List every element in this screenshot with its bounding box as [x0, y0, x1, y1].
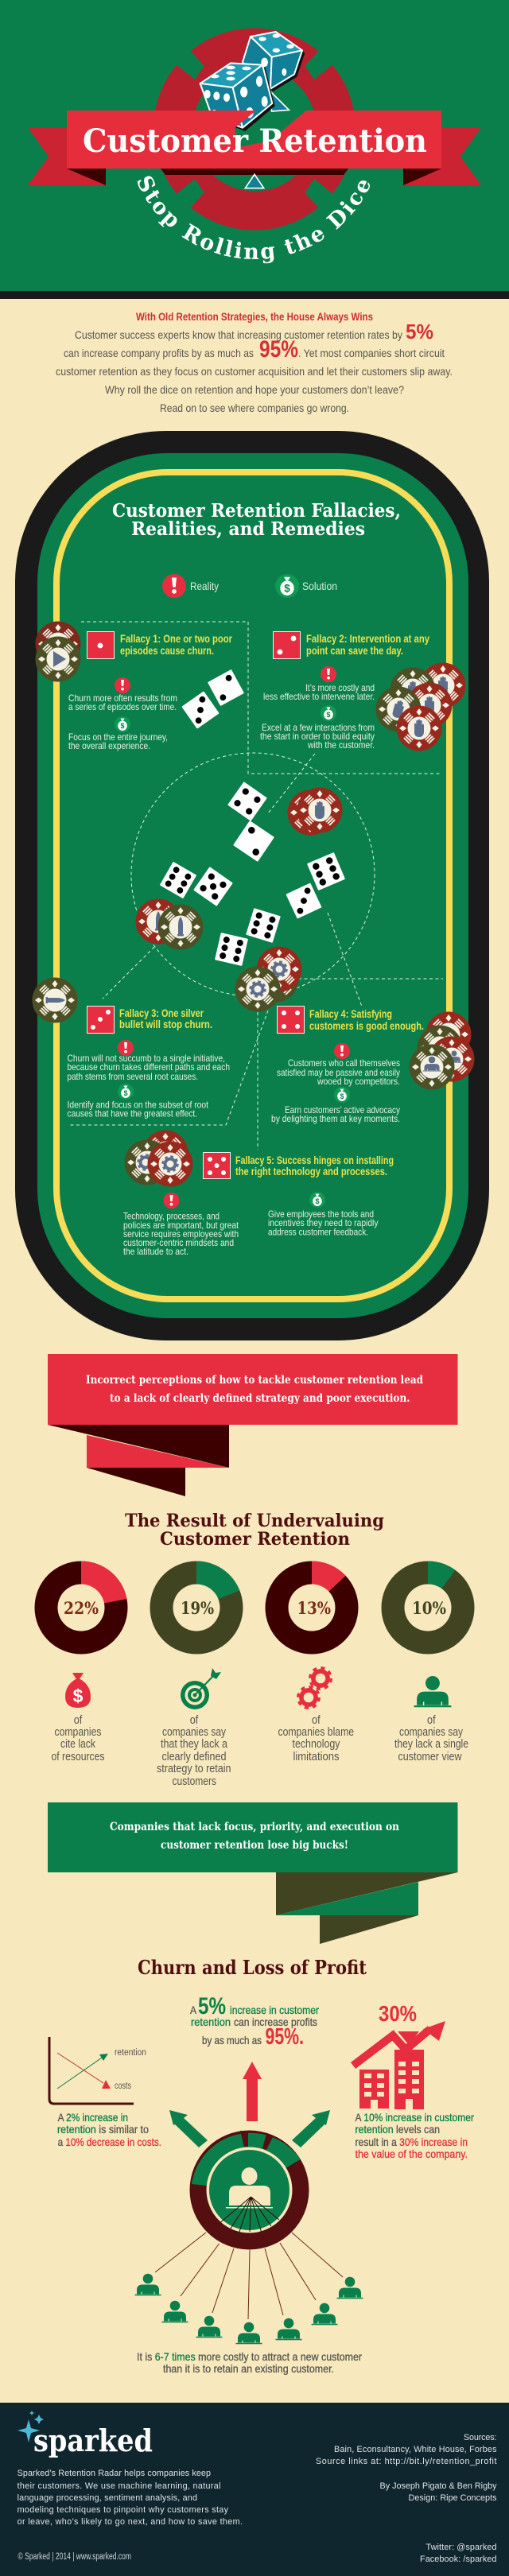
icon: building with growth arrow: 30% — [379, 2001, 417, 2026]
chip stack: gears centre — [235, 946, 302, 1011]
green ribbon callout: customer retention lose big bucks! — [161, 1839, 348, 1852]
intro text block: Read on to see where companies go wrong. — [160, 402, 349, 414]
icon: money bag — [65, 1673, 91, 1708]
red ribbon callout: to a lack of clearly defined strategy and poor execution. — [110, 1392, 410, 1405]
sources: Twitter: @sparked — [426, 2543, 496, 2552]
icon: building with growth arrow — [353, 2001, 445, 2109]
fallacy 3: Fallacy 3: One silver — [119, 1007, 204, 1019]
chip: bullet horizontal — [32, 978, 78, 1022]
title: Customer Retention — [83, 122, 427, 160]
about text: their customers. We use machine learning, natural — [17, 2481, 220, 2491]
chip stack: silver bullet — [135, 898, 204, 949]
fallacy 1: a series of episodes over time. — [68, 701, 177, 712]
fallacy 5: address customer feedback. — [268, 1226, 368, 1237]
donut chart 10%: 10% — [412, 1598, 446, 1618]
heading: result of undervaluing: The Result of Undervaluing — [125, 1511, 384, 1531]
caption column 4: companies say — [399, 1726, 464, 1739]
fallacy 4: by delighting them at key moments. — [271, 1113, 400, 1124]
fallacy 5: Give employees the tools and — [268, 1208, 374, 1220]
text: 2 percent: A 2% increase in — [58, 2111, 128, 2124]
icon: gears — [298, 1668, 331, 1708]
caption column 4 — [394, 1714, 468, 1763]
intro text block — [56, 310, 453, 414]
subtitle curved: Stop Rolling the Dice — [137, 177, 371, 264]
line chart: retention vs costs: costs — [115, 2081, 131, 2091]
chip stack: gears lower — [124, 1131, 192, 1186]
caption column 2: customers — [172, 1775, 216, 1788]
fallacy 2: the start in order to build equity — [260, 731, 375, 742]
dice pair — [181, 669, 244, 729]
fallacy 1: Fallacy 1: One or two poor — [120, 632, 232, 645]
text: 2 percent — [57, 2111, 161, 2148]
donut chart 22% — [35, 1562, 127, 1654]
fallacy 4: Fallacy 4: Satisfying — [309, 1007, 392, 1020]
intro text block: With Old Retention Strategies, the House Always Wins — [136, 310, 373, 323]
fallacy 4: Earn customers’ active advocacy — [285, 1104, 400, 1115]
table heading: Realities, and Remedies — [131, 518, 365, 540]
fallacy 3: because churn takes different paths and each — [67, 1061, 230, 1073]
caption column 2: strategy to retain — [157, 1763, 231, 1775]
intro text block: 95% — [259, 336, 298, 363]
fallacy 2: less effective to intervene later. — [263, 691, 375, 702]
table heading — [112, 500, 401, 540]
about text: language processing, sentiment analysis, and — [17, 2493, 197, 2503]
sources: By Joseph Pigato & Ben Rigby — [380, 2481, 497, 2491]
chip: play — [35, 622, 81, 682]
caption column 2: of — [190, 1714, 199, 1727]
green ribbon callout — [48, 1802, 458, 1944]
callout: 5 percent: 5% — [198, 1993, 226, 2019]
fallacy 1: Churn more often results from — [68, 692, 177, 704]
intro text block: Customer success experts know that increasing customer retention rates by — [75, 328, 402, 341]
fallacy 2 — [260, 631, 429, 751]
big chip with customer — [189, 2131, 309, 2250]
icon: person — [414, 1676, 451, 1707]
chip stack: hands — [375, 663, 466, 751]
caption column 3: technology — [293, 1738, 340, 1751]
donut chart 13% — [266, 1562, 358, 1654]
fallacy 5: incentives they need to rapidly — [268, 1217, 379, 1228]
text: 6-7 times — [137, 2350, 362, 2375]
text: 10 percent: the value of the company. — [355, 2147, 468, 2160]
callout: 5 percent: A — [190, 2004, 197, 2016]
intro text block: 5% — [406, 320, 433, 343]
panel: footer — [0, 2403, 509, 2576]
caption column 1: of — [74, 1714, 83, 1727]
sources: Bain, Econsultancy, White House, Forbes — [334, 2445, 497, 2454]
text: 10 percent — [355, 2111, 474, 2160]
caption column 1: of resources — [51, 1751, 105, 1763]
header panel — [0, 0, 509, 299]
caption column 1: cite lack — [60, 1738, 96, 1751]
donut chart 13%: 13% — [297, 1598, 331, 1618]
about text — [17, 2469, 243, 2527]
sources — [316, 2433, 497, 2564]
icon: target — [181, 1668, 221, 1709]
icon: right arrow — [292, 2110, 330, 2147]
legend: Reality — [190, 580, 219, 592]
intro text block: Why roll the dice on retention and hope your customers don’t leave? — [105, 383, 404, 396]
caption column 3 — [278, 1714, 354, 1763]
poker chip emblem — [169, 41, 340, 217]
caption column 1: companies — [54, 1726, 102, 1739]
fallacy 5: customer-centric mindsets and — [123, 1237, 234, 1248]
callout: 5 percent: 95%. — [266, 2024, 304, 2050]
fallacy 3: Churn will not succumb to a single initiative, — [67, 1053, 225, 1064]
about text: modeling techniques to pinpoint why customers stay — [17, 2505, 229, 2515]
caption column 3: limitations — [293, 1751, 339, 1763]
heading: churn: Churn and Loss of Profit — [138, 1956, 367, 1979]
sources: Source links at: http://bit.ly/retention_profit — [316, 2457, 496, 2466]
panel: casino table — [15, 431, 489, 1340]
callout: 5 percent: increase in customer — [230, 2004, 319, 2016]
fallacy 1 — [68, 631, 232, 751]
ribbon tails — [28, 127, 481, 185]
callout: 5 percent: can increase profits — [234, 2015, 317, 2028]
callout: 5 percent: retention — [191, 2015, 231, 2028]
red ribbon callout: Incorrect perceptions of how to tackle customer retention lead — [86, 1374, 423, 1387]
sources: Design: Ripe Concepts — [409, 2493, 497, 2503]
fallacy 3: Identify and focus on the subset of root — [67, 1099, 209, 1110]
callout: 5 percent — [190, 1993, 319, 2050]
green ribbon callout: Companies that lack focus, priority, and execution on — [110, 1821, 399, 1833]
caption column 4: customer view — [398, 1751, 462, 1763]
about text: or leave, who’s likely to go next, and how to save them. — [17, 2517, 243, 2527]
caption column 2: companies say — [162, 1726, 227, 1739]
table heading: Customer Retention Fallacies, — [112, 500, 401, 522]
fallacy 5 — [123, 1153, 394, 1257]
red ribbon callout — [48, 1354, 458, 1496]
intro text block: customer retention as they focus on customer acquisition and let their customers slip away. — [56, 365, 453, 378]
legend — [162, 574, 337, 598]
about text: Sparked’s Retention Radar helps companies keep — [17, 2469, 211, 2478]
fallacy 3 — [67, 1007, 230, 1119]
fallacy 4: Customers who call themselves — [288, 1057, 400, 1069]
donut chart 22%: 22% — [64, 1598, 99, 1618]
fallacy 3: bullet will stop churn. — [119, 1018, 212, 1030]
text: 6-7 times: than it is to retain an existing customer. — [163, 2362, 334, 2375]
customer icons — [135, 2274, 363, 2344]
fallacy 2: It’s more costly and — [305, 682, 375, 693]
caption column 2: clearly defined — [162, 1751, 226, 1763]
caption column 4: they lack a single — [394, 1738, 468, 1751]
icon: teal dice — [200, 32, 305, 188]
heading: result of undervaluing — [125, 1511, 384, 1550]
centre dice — [160, 782, 345, 966]
fallacy 4: wooed by competitors. — [317, 1076, 400, 1087]
caption column 1 — [51, 1714, 105, 1763]
icon: up arrow — [243, 2062, 262, 2121]
intro text block: . Yet most companies short circuit — [298, 347, 445, 359]
sources: Sources: — [464, 2433, 496, 2442]
caption column 2: that they lack a — [161, 1738, 228, 1751]
chip stack: centre hand — [288, 787, 342, 835]
fallacy 2: point can save the day. — [306, 644, 403, 657]
fallacy 2: Excel at a few interactions from — [262, 722, 375, 733]
fallacy 2: Fallacy 2: Intervention at any — [306, 632, 429, 645]
fallacy 5: the right technology and processes. — [235, 1165, 387, 1177]
sources: Facebook: /sparked — [420, 2555, 496, 2564]
fallacy 5: service requires employees with — [123, 1228, 239, 1240]
logo: sparked — [33, 2423, 153, 2458]
caption column 3: of — [312, 1714, 321, 1727]
heading: result of undervaluing: Customer Retention — [160, 1529, 350, 1550]
line chart: retention vs costs: retention — [115, 2048, 146, 2058]
connecting lines — [155, 2233, 343, 2319]
fallacy 2: with the customer. — [307, 739, 375, 751]
donut chart 19%: 19% — [181, 1598, 214, 1618]
donut chart 19% — [150, 1562, 243, 1654]
line chart: retention vs costs — [49, 2037, 146, 2104]
fallacy 1: episodes cause churn. — [120, 644, 214, 657]
text: 10 percent: A 10% increase in customer — [355, 2111, 474, 2124]
fallacy 5: policies are important, but great — [123, 1220, 239, 1231]
callout: 5 percent: by as much as — [202, 2034, 262, 2046]
main banner — [67, 111, 441, 169]
text: 10 percent: retention levels can — [355, 2123, 440, 2136]
fallacy 5: the latitude to act. — [123, 1246, 188, 1257]
fallacy 5: Technology, processes, and — [123, 1210, 220, 1221]
caption column 4: of — [427, 1714, 436, 1727]
text: 6-7 times: It is 6-7 times more costly to attract a new customer — [137, 2350, 362, 2363]
fallacy 1: Focus on the entire journey, — [68, 731, 168, 743]
intro text block: can increase company profits by as much as — [64, 347, 254, 359]
icon: money bag: $ — [73, 1686, 84, 1706]
fallacy 4: satisfied may be passive and easily — [277, 1067, 400, 1078]
fallacy 1: the overall experience. — [68, 740, 150, 751]
caption column 3: companies blame — [278, 1726, 354, 1739]
text: 2 percent: a 10% decrease in costs. — [58, 2136, 161, 2148]
donut chart 10% — [382, 1562, 474, 1654]
copyright: © Sparked | 2014 | www.sparked.com — [17, 2552, 131, 2562]
text: 10 percent: result in a 30% increase in — [355, 2136, 468, 2148]
fallacy 3: causes that have the greatest effect. — [67, 1108, 197, 1119]
fallacy 5: Fallacy 5: Success hinges on installing — [235, 1154, 394, 1166]
caption column 2 — [157, 1714, 231, 1788]
legend: Solution — [302, 580, 337, 592]
logo — [17, 2411, 153, 2458]
icon: left arrow — [169, 2110, 208, 2147]
chip stack: person — [409, 1011, 474, 1089]
fallacy 4 — [271, 1007, 424, 1124]
text: 2 percent: retention is similar to — [57, 2123, 149, 2136]
fallacy 4: customers is good enough. — [309, 1019, 424, 1032]
fallacy 3: path stems from several root causes. — [67, 1071, 198, 1082]
